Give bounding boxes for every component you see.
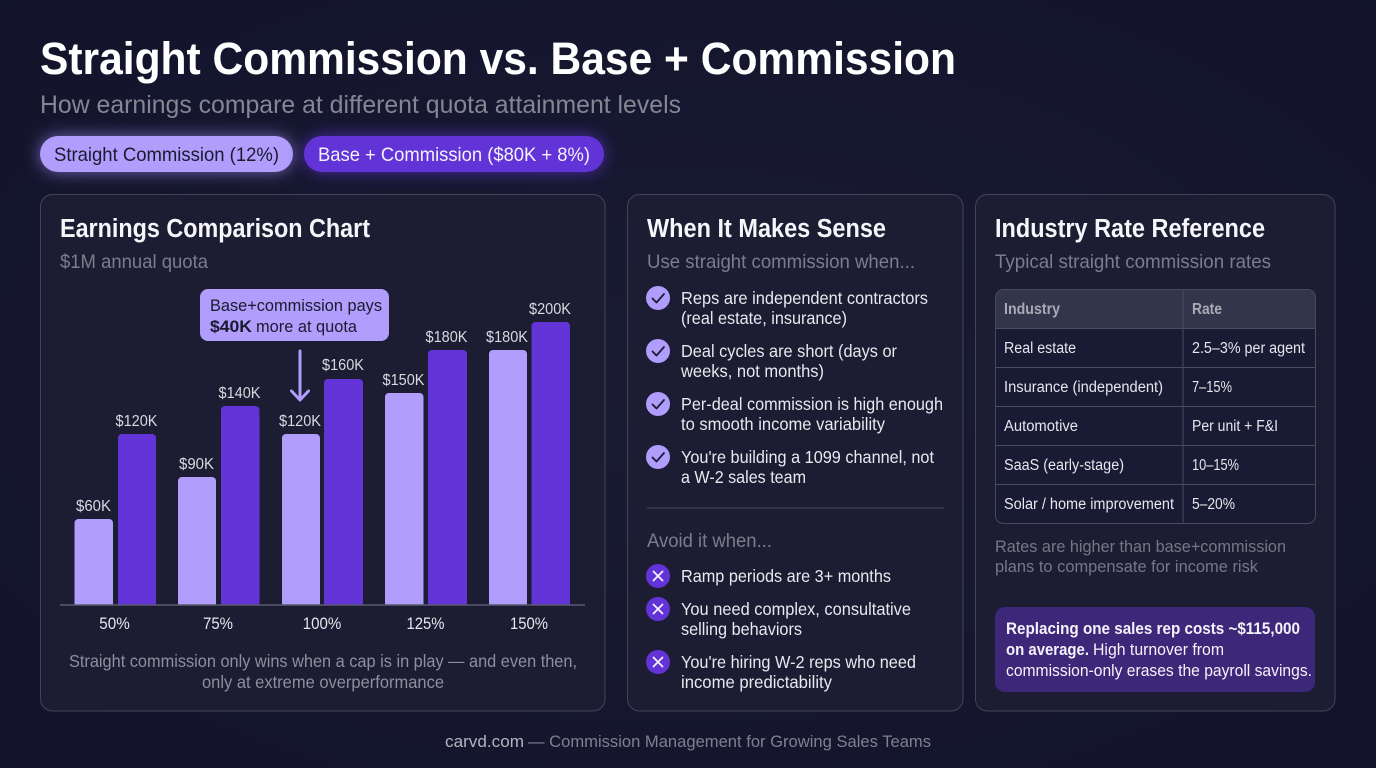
item: consultative selling: selling behaviors — [681, 619, 802, 639]
group 125%: $180K — [426, 329, 468, 346]
group 100%: $160K — [322, 357, 365, 374]
legend pill: base plus commission — [304, 136, 604, 172]
use-when list — [646, 286, 943, 487]
table header: Industry — [1004, 301, 1060, 318]
legend pill: straight commission: Straight Commission (12%) — [54, 144, 279, 166]
callout: base plus commission pays more: more at quota — [256, 318, 358, 336]
item: consultative selling: You need complex, consultative — [681, 599, 911, 619]
item: independent contractors: (real estate, insurance) — [681, 308, 847, 328]
group 50%: 50% — [99, 615, 130, 633]
row: saas: 10–15% — [1192, 457, 1239, 474]
heading: When It Makes Sense — [647, 215, 886, 243]
table note: plans to compensate for income risk — [995, 558, 1259, 576]
legend pill: base plus commission: Base + Commission ($80K + 8%) — [318, 144, 590, 166]
callout: base plus commission pays more — [200, 289, 389, 341]
item: short deal cycles: weeks, not months) — [680, 361, 824, 381]
table header: Rate — [1192, 301, 1222, 318]
table note: Rates are higher than base+commission — [995, 538, 1286, 556]
row: real estate: 2.5–3% per agent — [1192, 340, 1306, 357]
group 75%: 75% — [203, 615, 233, 633]
item: 1099 channel: a W-2 sales team — [681, 467, 806, 487]
item: independent contractors: Reps are independent contractors — [681, 288, 928, 308]
item: per-deal commission: to smooth income variability — [681, 414, 885, 434]
row: automotive: Automotive — [1004, 418, 1078, 435]
title: Straight Commission vs. Base + Commission — [40, 33, 956, 84]
group 50% — [74, 413, 158, 633]
group 50%: $60K — [76, 498, 112, 515]
group 150% — [486, 301, 572, 633]
rate table — [996, 290, 1316, 524]
bar chart — [60, 301, 585, 633]
group 125% — [382, 329, 468, 633]
row: saas — [1004, 457, 1239, 474]
callout: replacement cost: on average. — [1006, 641, 1089, 659]
callout: replacement cost: High turnover from — [1093, 641, 1224, 659]
group 100% — [279, 357, 365, 633]
group 50%: $120K — [116, 413, 158, 430]
subheading: Typical straight commission rates — [995, 251, 1271, 273]
subheading: Use straight commission when... — [647, 251, 915, 273]
heading: Industry Rate Reference — [995, 215, 1265, 243]
item: 1099 channel — [646, 445, 934, 487]
chart caption: Straight commission only wins when a cap is in play — and even then, — [69, 651, 577, 671]
arrow: callout to 100% bar — [292, 351, 308, 400]
row: real estate: Real estate — [1004, 340, 1076, 357]
panel: when it makes sense — [628, 194, 963, 711]
avoid-when list — [646, 564, 916, 692]
row: solar: Solar / home improvement — [1004, 496, 1175, 513]
item: 1099 channel: You're building a 1099 channel, not — [681, 447, 934, 467]
item: ramp periods: Ramp periods are 3+ months — [681, 566, 891, 586]
group 150%: $200K — [529, 301, 572, 318]
item: independent contractors — [646, 286, 928, 328]
group 125%: 125% — [406, 615, 445, 633]
panel: earnings comparison chart — [40, 194, 605, 711]
group 75%: $140K — [218, 385, 261, 402]
group 150%: 150% — [510, 615, 548, 633]
item: W-2 reps — [646, 650, 916, 692]
group 125%: $150K — [382, 372, 425, 389]
row: automotive — [1004, 418, 1278, 435]
row: saas: SaaS (early-stage) — [1004, 457, 1124, 474]
subtitle: How earnings compare at different quota attainment levels — [40, 91, 681, 119]
row: solar: 5–20% — [1192, 496, 1235, 513]
chart caption — [69, 651, 577, 692]
item: per-deal commission: Per-deal commission is high enough — [681, 394, 943, 414]
avoid heading: Avoid it when... — [647, 530, 772, 552]
legend pill: straight commission — [40, 136, 293, 172]
footer: — Commission Management for Growing Sales Teams — [528, 733, 931, 751]
group 100%: 100% — [303, 615, 342, 633]
item: short deal cycles: Deal cycles are short (days or — [681, 341, 897, 361]
item: W-2 reps: income predictability — [681, 672, 832, 692]
callout: base plus commission pays more: Base+commission pays — [210, 297, 382, 315]
legend — [40, 136, 604, 172]
item: W-2 reps: You're hiring W-2 reps who need — [681, 652, 916, 672]
row: insurance: 7–15% — [1192, 379, 1232, 396]
row: real estate — [1004, 340, 1306, 357]
group 75% — [178, 385, 261, 633]
panel: industry rate reference — [976, 194, 1335, 711]
footer: carvd.com — [445, 733, 524, 751]
row: automotive: Per unit + F&I — [1192, 418, 1278, 435]
row: insurance: Insurance (independent) — [1004, 379, 1163, 396]
group 100%: $120K — [279, 413, 322, 430]
item: consultative selling — [646, 597, 911, 639]
table note — [995, 538, 1286, 576]
callout: replacement cost — [995, 607, 1315, 692]
heading: Earnings Comparison Chart — [60, 215, 370, 243]
callout: replacement cost: commission-only erases the payroll savings. — [1006, 662, 1312, 680]
chart caption: only at extreme overperformance — [202, 672, 444, 692]
callout: base plus commission pays more: $40K — [210, 318, 252, 336]
subheading: $1M annual quota — [60, 251, 208, 273]
item: ramp periods — [646, 564, 891, 588]
table header — [1004, 301, 1222, 318]
group 150%: $180K — [486, 329, 529, 346]
group 75%: $90K — [179, 456, 215, 473]
item: short deal cycles — [646, 339, 897, 381]
callout: replacement cost: Replacing one sales rep costs ~$115,000 — [1006, 620, 1300, 638]
item: per-deal commission — [646, 392, 943, 434]
